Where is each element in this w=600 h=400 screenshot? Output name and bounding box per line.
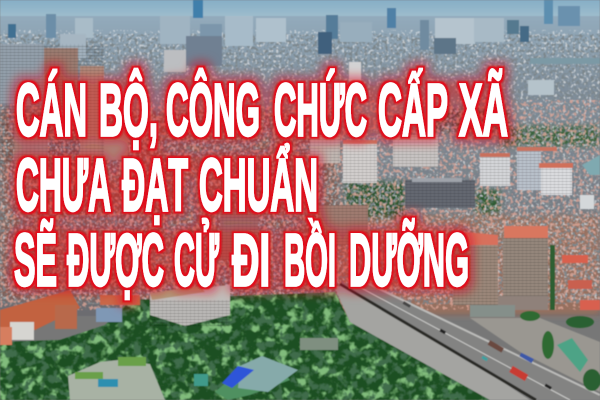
headline line 1: BỘ, bbox=[99, 68, 158, 152]
elevated highway bbox=[340, 283, 600, 400]
title: CHUẨN bbox=[199, 144, 318, 226]
red-roof villas bottom left bbox=[0, 290, 140, 345]
blue sports court with green roofs bbox=[194, 338, 338, 400]
parking road beside flyover bbox=[335, 282, 530, 400]
tan high-rise towers bbox=[453, 226, 548, 310]
infographic: aerial city photo with headline: XÃ bbox=[459, 68, 508, 152]
red-roof neighbourhood at right bbox=[550, 245, 600, 310]
headline line 1: CÔNG bbox=[166, 68, 260, 152]
headline line 3: ĐƯỢC bbox=[67, 218, 164, 302]
bottom ground and trees bbox=[0, 292, 490, 400]
rooftop mottling: salmon bbox=[0, 100, 600, 310]
intersection and buildings bottom right bbox=[470, 305, 600, 392]
headline line 3: SẼ bbox=[14, 218, 57, 302]
left towers bbox=[0, 44, 128, 165]
rooftop mottling: dark bbox=[0, 34, 600, 304]
headline line 3 bbox=[14, 218, 469, 302]
headline line 2: ĐẠT bbox=[122, 144, 188, 226]
title bbox=[14, 68, 508, 302]
white colonial building bbox=[96, 285, 230, 326]
headline line 3: CỬ bbox=[174, 218, 219, 302]
headline line 2: CHƯA bbox=[16, 144, 111, 226]
red-roof tint zones bbox=[0, 108, 600, 315]
headline line 1: CHỨC bbox=[274, 68, 367, 152]
pond top right bbox=[582, 155, 600, 175]
rooftop mottling: light bbox=[0, 30, 600, 300]
right mid-rise apartment blocks bbox=[220, 80, 594, 260]
headline line 1: CÁN bbox=[16, 68, 87, 152]
headline line 1: CẤP bbox=[378, 68, 448, 152]
sky bbox=[0, 0, 600, 22]
headline line 3: ĐI bbox=[232, 218, 270, 302]
headline line 3: BỒI bbox=[284, 218, 336, 302]
hazy city base bbox=[0, 16, 600, 316]
headline line 1 bbox=[16, 68, 508, 152]
distant skyline bbox=[8, 0, 600, 82]
